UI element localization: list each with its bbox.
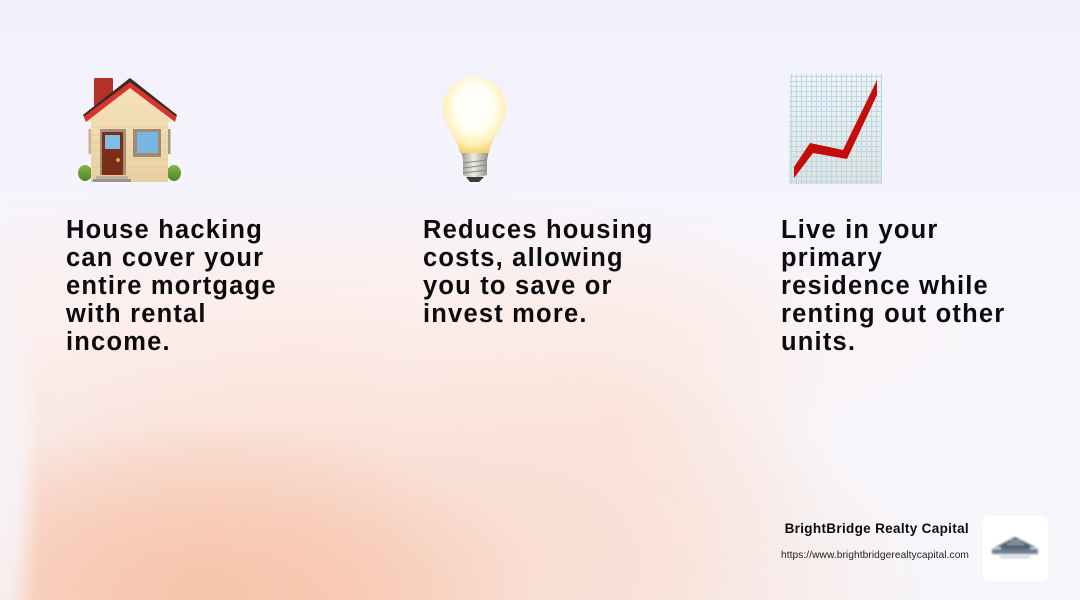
- text block: live in residence: renting out other: [781, 300, 1005, 328]
- icon: rising chart: [789, 74, 882, 184]
- brand name: BrightBridge Realty Capital: [785, 521, 969, 536]
- logo card: [983, 516, 1048, 581]
- text block: live in residence: Live in your: [781, 216, 939, 244]
- text block: live in residence: primary: [781, 244, 883, 272]
- website url: https://www.brightbridgerealtycapital.com: [781, 550, 969, 561]
- text block: reduces housing costs: you to save or: [423, 272, 613, 300]
- text block: house hacking: entire mortgage: [66, 272, 277, 300]
- text block: live in residence: [781, 216, 1005, 356]
- text block: live in residence: units.: [781, 328, 856, 356]
- text block: reduces housing costs: Reduces housing: [423, 216, 654, 244]
- text block: house hacking: income.: [66, 328, 171, 356]
- text block: reduces housing costs: costs, allowing: [423, 244, 624, 272]
- text block: house hacking: can cover your: [66, 244, 264, 272]
- text block: house hacking: House hacking: [66, 216, 263, 244]
- text block: reduces housing costs: [423, 216, 654, 328]
- text block: live in residence: residence while: [781, 272, 989, 300]
- text block: reduces housing costs: invest more.: [423, 300, 588, 328]
- text block: house hacking: [66, 216, 277, 356]
- icon: house: [78, 78, 181, 182]
- icon: light bulb: [443, 77, 506, 182]
- text block: house hacking: with rental: [66, 300, 207, 328]
